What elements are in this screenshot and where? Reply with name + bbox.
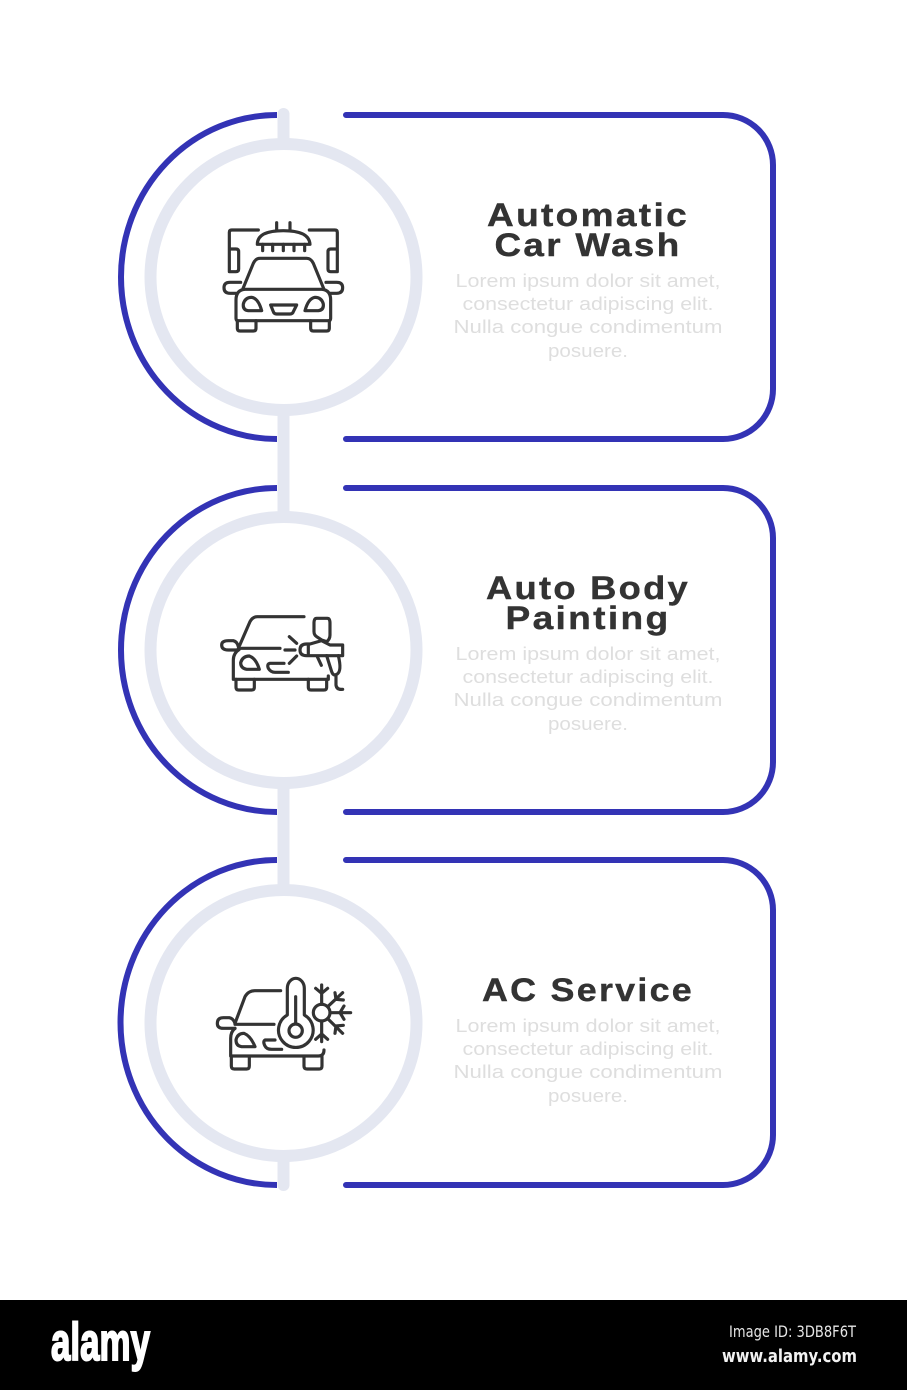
text block 2: [454, 643, 722, 734]
icon: spray painting car: [222, 617, 343, 690]
text block 3: posuere.: [548, 1085, 628, 1106]
icon: car wash: [224, 223, 343, 331]
blue outer arc 3: [121, 860, 277, 1185]
panel: auto body painting: [121, 488, 773, 812]
text block 3: consectetur adipiscing elit.: [462, 1038, 714, 1059]
text block 2: consectetur adipiscing elit.: [462, 666, 714, 687]
blue rounded card outline 3: [346, 860, 773, 1185]
text block 2: Nulla congue condimentum: [454, 689, 722, 710]
text block 1: [454, 270, 722, 361]
blue outer arc 2: [121, 488, 277, 812]
text block 1: Nulla congue condimentum: [454, 316, 722, 337]
logo: alamy: alamy: [51, 1313, 150, 1372]
text block 3: Lorem ipsum dolor sit amet,: [456, 1015, 720, 1036]
text block 3: [454, 1015, 722, 1106]
text block 2: posuere.: [548, 713, 628, 734]
heading 2: [486, 570, 690, 636]
text block 1: Lorem ipsum dolor sit amet,: [456, 270, 720, 291]
heading 1: Automatic: [487, 197, 689, 233]
vertical connector line: [278, 114, 290, 1185]
image id: Image ID: 3DB8F6T: [729, 1322, 856, 1341]
heading 2: Painting: [506, 600, 670, 636]
blue outer arc 1: [121, 115, 277, 439]
icon: car air conditioning: [217, 978, 351, 1069]
blue rounded card outline 2: [346, 488, 773, 812]
heading 1: [487, 197, 689, 263]
text block 1: posuere.: [548, 340, 628, 361]
website: www.alamy.com: [722, 1347, 857, 1367]
grey circle 2: [150, 517, 416, 783]
heading 2: Auto Body: [486, 570, 690, 606]
text block 2: Lorem ipsum dolor sit amet,: [456, 643, 720, 664]
grey circle 3: [150, 890, 416, 1156]
text block 1: consectetur adipiscing elit.: [462, 293, 714, 314]
grey circle 1: [150, 144, 416, 410]
footer bar: [0, 1300, 907, 1390]
heading 3: AC Service: [482, 972, 694, 1008]
panel: ac service: [121, 860, 773, 1185]
text block 3: Nulla congue condimentum: [454, 1061, 722, 1082]
blue rounded card outline 1: [346, 115, 773, 439]
heading 1: Car Wash: [494, 227, 682, 263]
panel: automatic car wash: [121, 115, 773, 439]
